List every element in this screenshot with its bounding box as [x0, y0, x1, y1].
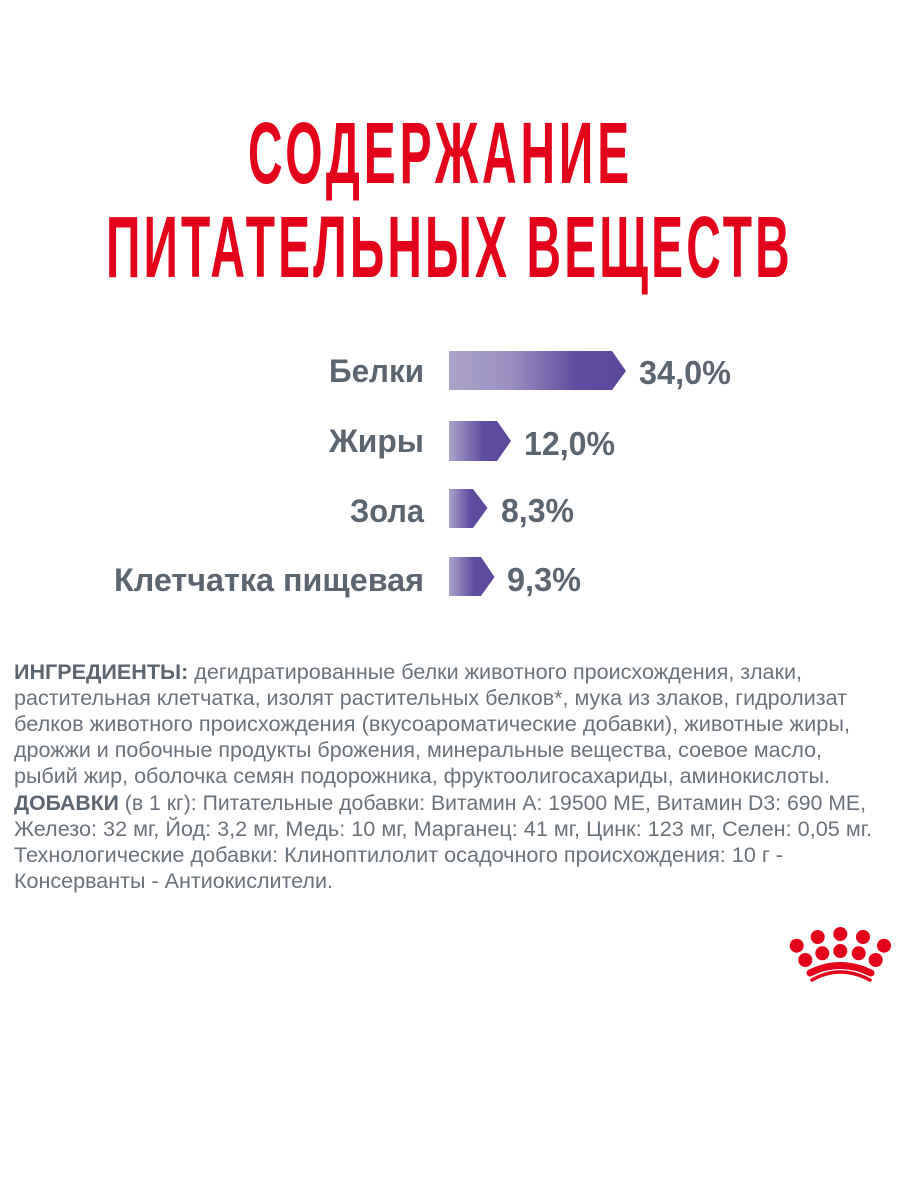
ingredients text block: белков животного происхождения (вкусоароматические добавки), животные жиры,	[14, 713, 850, 736]
row: protein: 34,0%	[639, 354, 731, 391]
ingredients text block: ИНГРЕДИЕНТЫ: дегидратированные белки животного происхождения, злаки,	[14, 661, 802, 684]
title	[106, 104, 790, 296]
icon: royal crown logo	[790, 927, 891, 980]
row: fat	[328, 421, 615, 462]
row: protein	[329, 351, 731, 391]
ingredients text block: дрожжи и побочные продукты брожения, минеральные вещества, соевое масло,	[14, 739, 822, 762]
ingredients text block: Консерванты - Антиокислители.	[14, 870, 333, 893]
row: fibre: 9,3%	[507, 561, 581, 598]
nutrient bar chart	[114, 351, 731, 598]
row: fat: 12,0%	[524, 425, 615, 462]
row: ash: Зола	[350, 493, 424, 529]
row: fibre: Клетчатка пищевая	[114, 562, 424, 598]
title: ПИТАТЕЛЬНЫХ ВЕЩЕСТВ	[106, 198, 790, 296]
ingredients text block: рыбий жир, оболочка семян подорожника, фруктоолигосахариды, аминокислоты.	[14, 765, 830, 788]
ingredients text block: Железо: 32 мг, Йод: 3,2 мг, Медь: 10 мг, Марганец: 41 мг, Цинк: 123 мг, Селен: 0,05 мг.	[14, 817, 872, 841]
ingredients text block: растительная клетчатка, изолят растительных белков*, мука из злаков, гидролизат	[14, 687, 847, 710]
title: СОДЕРЖАНИЕ	[248, 104, 629, 202]
row: ash	[350, 489, 574, 529]
ingredients text block: ДОБАВКИ (в 1 кг): Питательные добавки: Витамин А: 19500 МЕ, Витамин D3: 690 МЕ,	[14, 792, 866, 815]
ingredients text block: Технологические добавки: Клиноптилолит осадочного происхождения: 10 г -	[14, 844, 783, 867]
row: fat: Жиры	[328, 423, 424, 459]
row: protein: Белки	[329, 353, 424, 389]
row: ash: 8,3%	[501, 492, 574, 529]
row: fibre	[114, 557, 581, 598]
ingredients text block	[14, 661, 872, 893]
